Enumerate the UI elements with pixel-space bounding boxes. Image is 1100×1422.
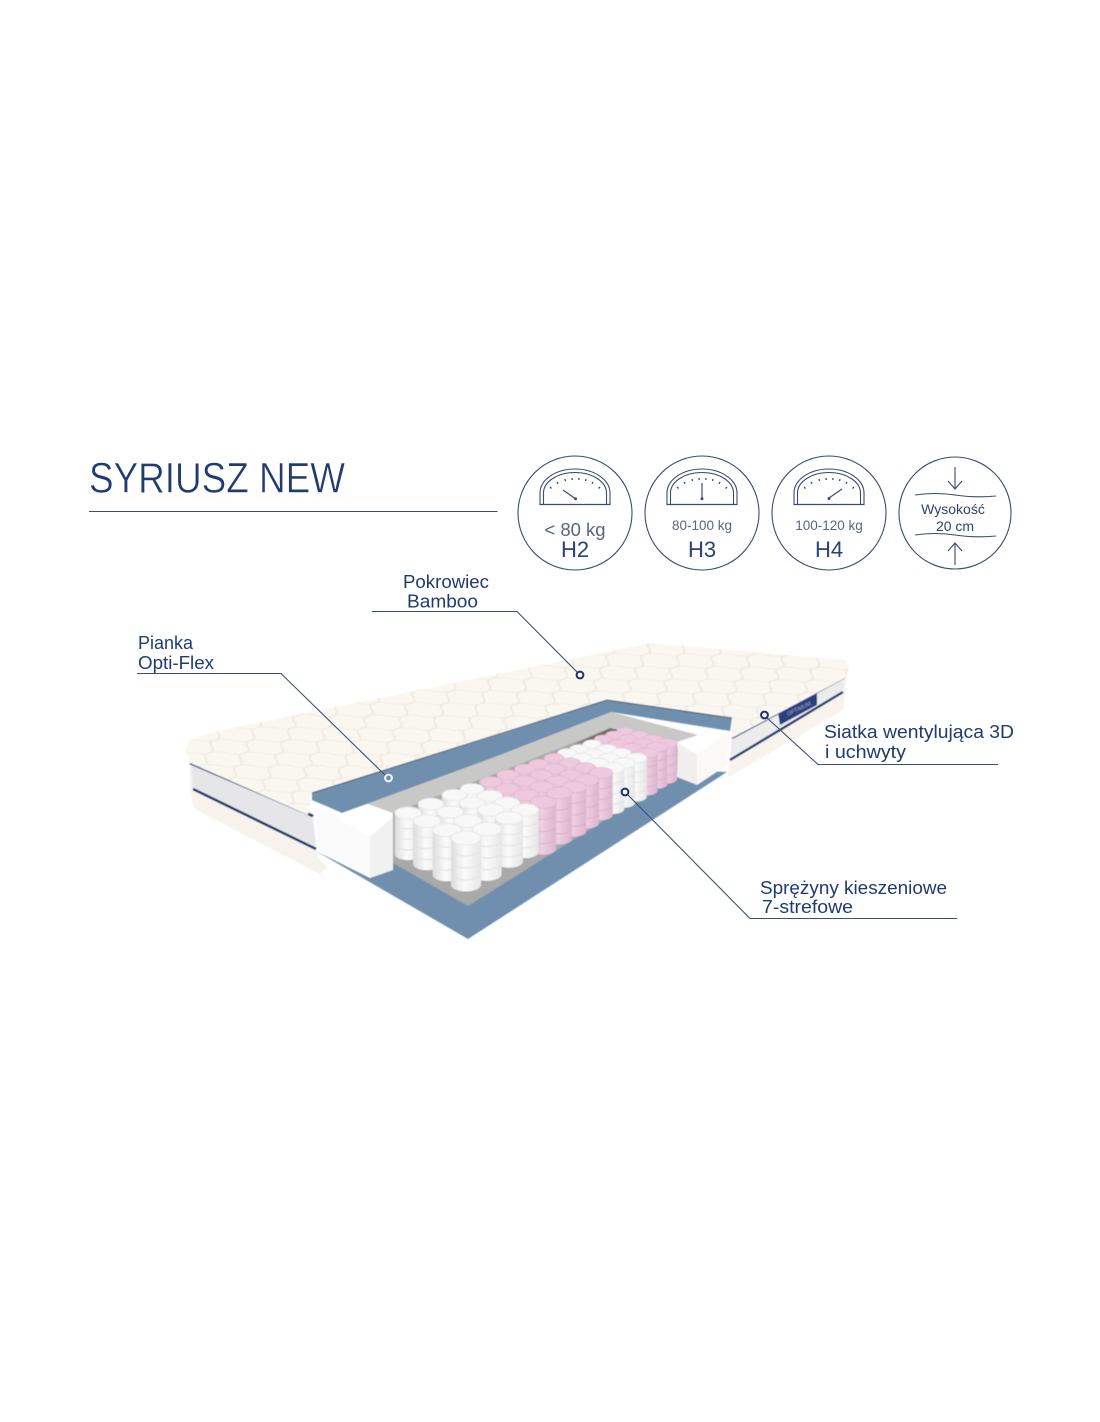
callout: Siatka wentylująca 3D: Siatka wentylująca 3D bbox=[824, 722, 1014, 742]
right side panel bbox=[727, 664, 848, 778]
callout: Siatka wentylująca 3D bbox=[761, 712, 1014, 764]
icon: firmness H3: 80-100 kg bbox=[672, 518, 732, 533]
icon: firmness H2: H2 bbox=[561, 537, 589, 562]
icon: firmness H4 bbox=[772, 456, 886, 570]
callout: Pokrowiec Bamboo bbox=[372, 572, 583, 678]
top foam layer bbox=[312, 700, 732, 813]
quilted cover bbox=[185, 643, 849, 815]
callout: Sprężyny kieszeniowe: Sprężyny kieszeniowe bbox=[760, 878, 947, 898]
title: SYRIUSZ NEW bbox=[89, 453, 346, 502]
left side panel bbox=[190, 762, 328, 874]
icon: firmness H4: 100-120 kg bbox=[795, 518, 863, 533]
callout: Sprężyny kieszeniowe: 7-strefowe bbox=[762, 897, 853, 917]
callout: Pianka Opti-Flex: Pianka bbox=[138, 633, 194, 653]
foam block right bbox=[677, 730, 730, 785]
icon: height 20 cm: Wysokość bbox=[921, 501, 985, 517]
upper felt sheet bbox=[365, 712, 698, 813]
floor felt bbox=[393, 728, 680, 906]
callout: Pokrowiec Bamboo: Pokrowiec bbox=[403, 572, 489, 592]
icon: firmness H3 bbox=[645, 456, 759, 570]
icon: height 20 cm: 20 cm bbox=[936, 518, 974, 534]
foam block left bbox=[315, 805, 393, 878]
callout: Siatka wentylująca 3D: i uchwyty bbox=[825, 742, 906, 762]
icon: firmness H4: H4 bbox=[815, 537, 843, 562]
bottom foam layer bbox=[316, 770, 727, 939]
icon: height 20 cm bbox=[899, 457, 1011, 569]
right side panel: OPTIMUM bbox=[786, 701, 813, 718]
icon: firmness H3: H3 bbox=[688, 537, 716, 562]
callout: Pianka Opti-Flex bbox=[137, 633, 392, 781]
callout: Pianka Opti-Flex: Opti-Flex bbox=[138, 653, 214, 673]
callout: Sprężyny kieszeniowe bbox=[622, 789, 957, 918]
pocket springs bbox=[395, 727, 677, 892]
callout: Pokrowiec Bamboo: Bamboo bbox=[407, 592, 478, 612]
icon: firmness H2 bbox=[518, 456, 632, 570]
icon: firmness H2: < 80 kg bbox=[544, 519, 606, 540]
dark back recess bbox=[575, 728, 677, 748]
mattress cutaway bbox=[185, 643, 849, 939]
